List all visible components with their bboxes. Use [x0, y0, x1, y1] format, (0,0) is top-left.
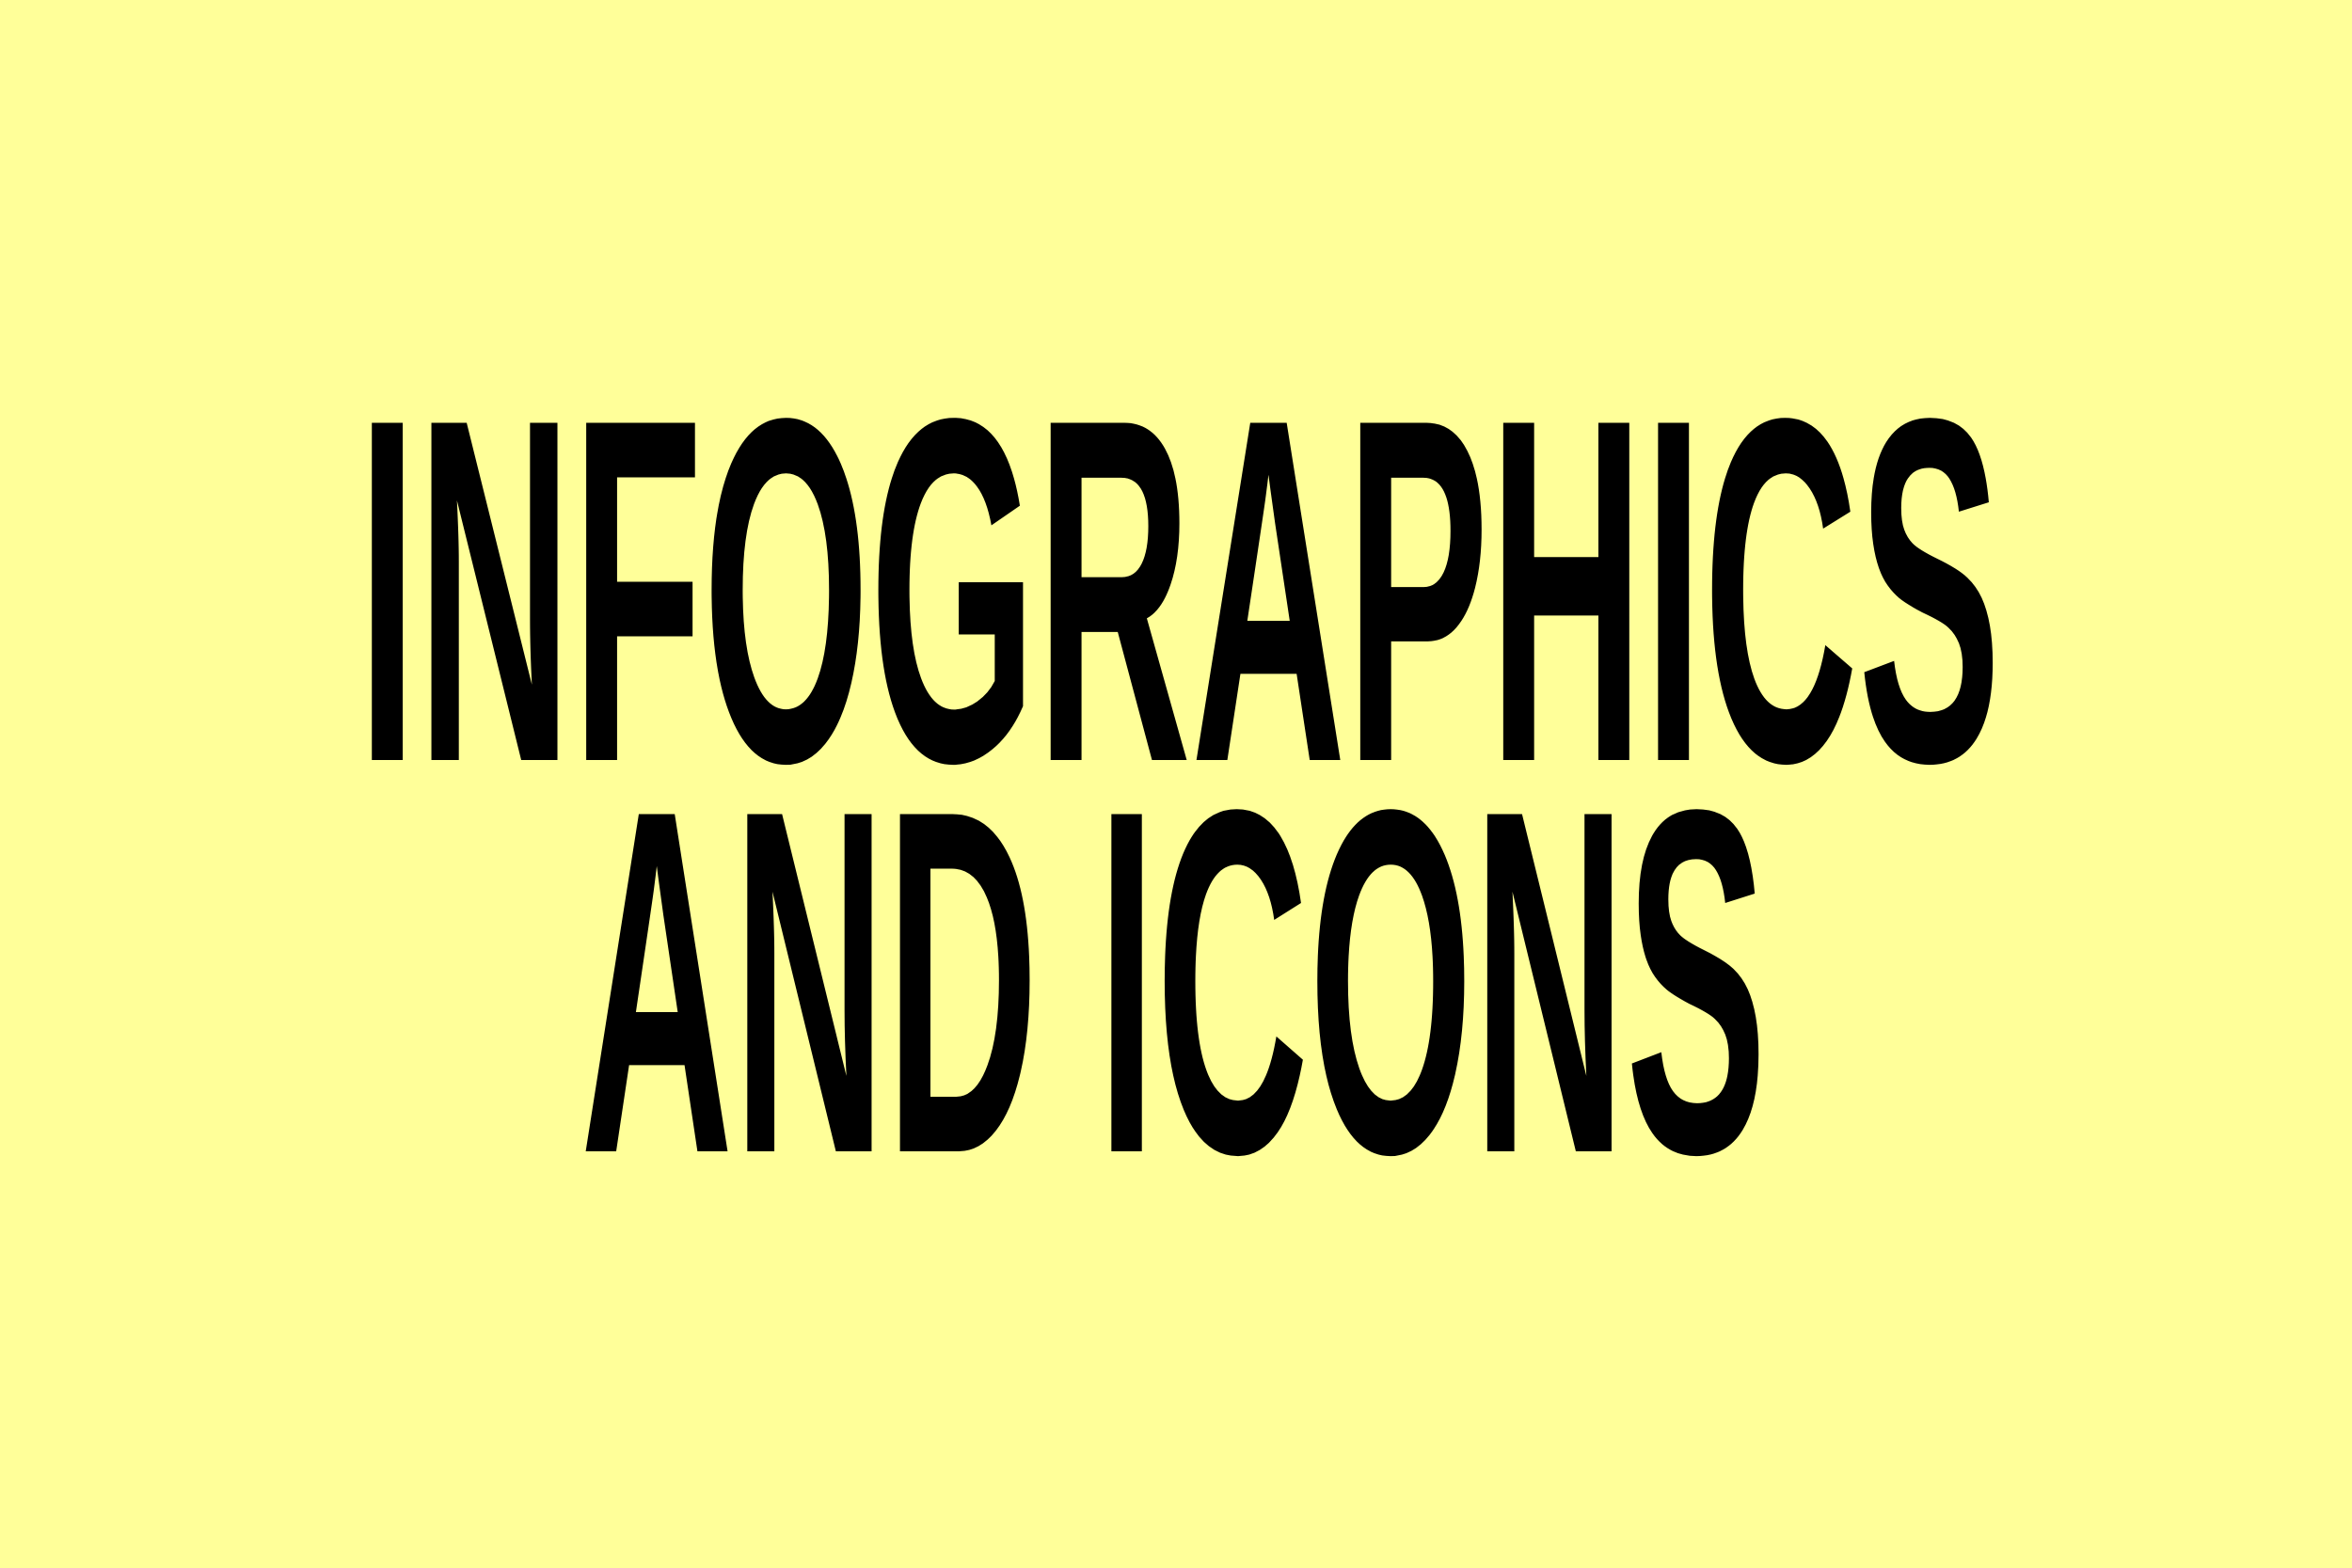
title	[358, 317, 2001, 1256]
